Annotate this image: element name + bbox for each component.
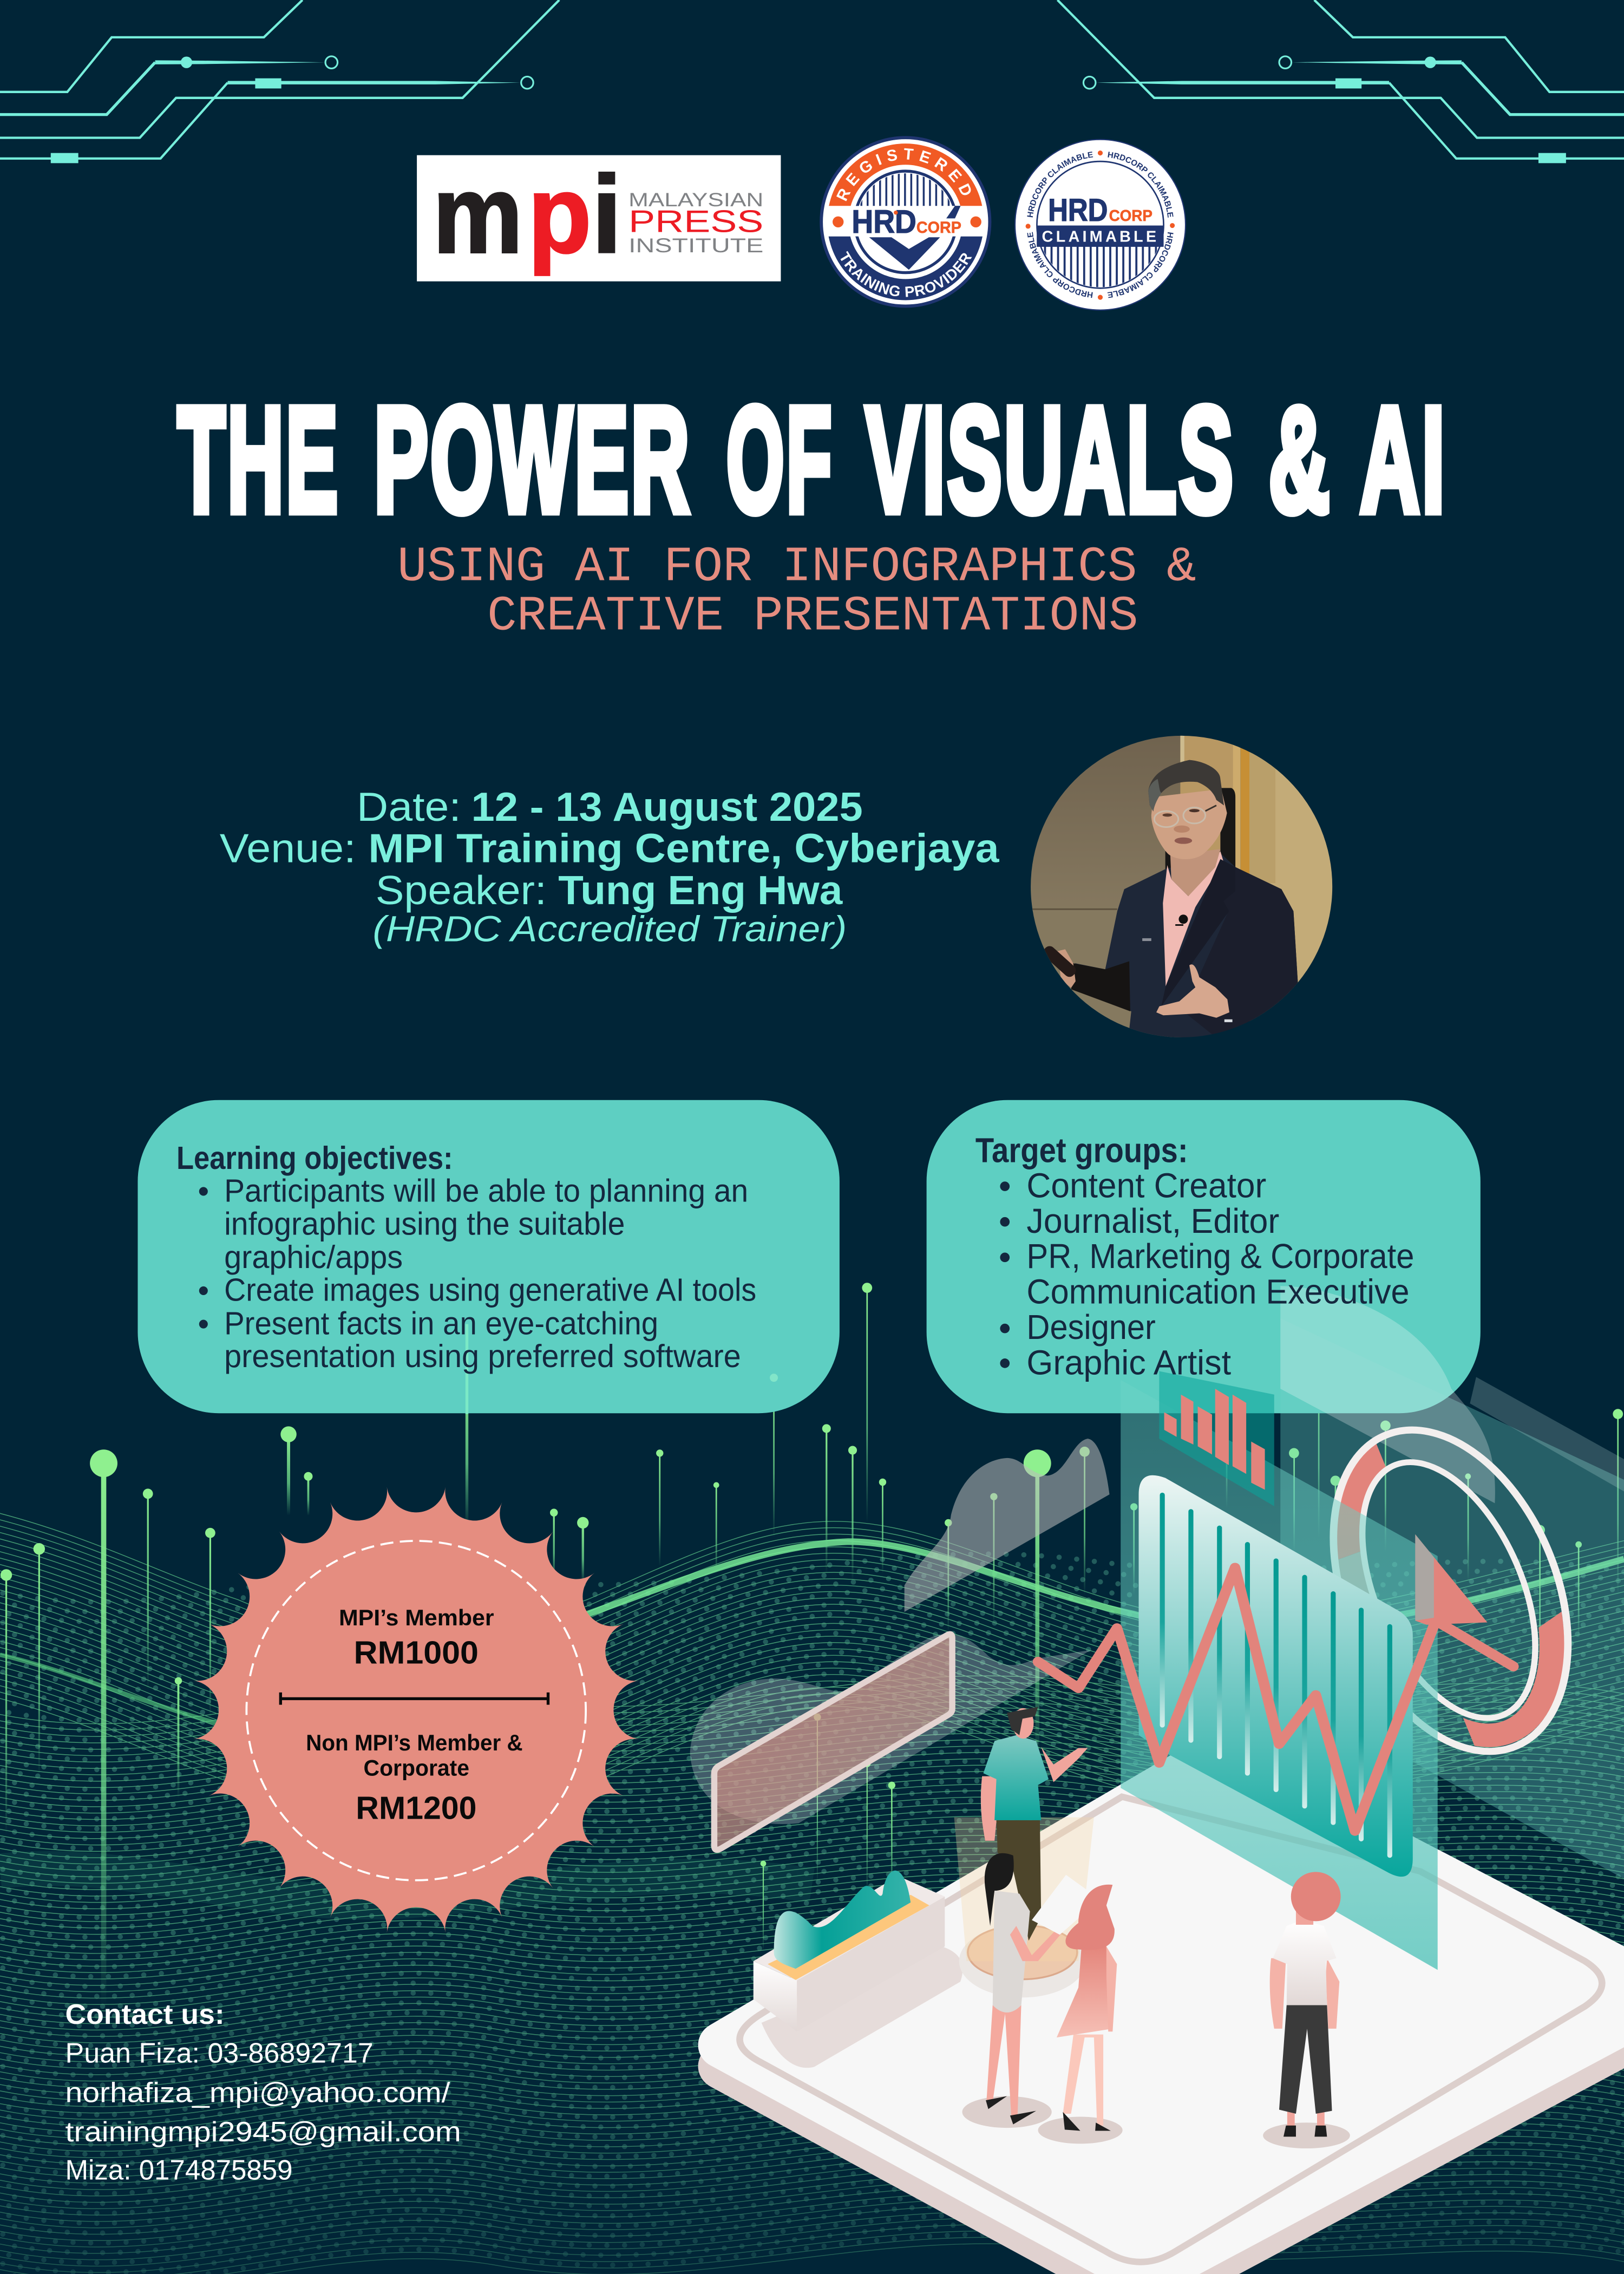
contact details: Contact us:: [66, 1999, 225, 2030]
person: woman with document: [962, 1853, 1100, 2128]
subtitle: CREATIVE PRESENTATIONS: [487, 589, 1138, 645]
logo: Malaysian Press Institute: [417, 153, 781, 282]
circuit lines top left: [0, 0, 559, 163]
badge: HRD Corp registered training provider: REGISTERED: [836, 148, 971, 201]
badge: HRD Corp claimable: [1014, 139, 1186, 311]
event details: Speaker:: [376, 867, 547, 913]
text: learning objectives: [176, 1141, 756, 1374]
contact details: Miza: 0174875859: [66, 2155, 293, 2186]
person: presenter: [981, 1707, 1088, 1940]
price badge: [193, 1487, 639, 1933]
logo: Malaysian Press Institute: p: [528, 153, 592, 276]
translucent mountain chart: [905, 1439, 1110, 1612]
contact details: norhafiza_mpi@yahoo.com/: [66, 2077, 450, 2108]
data stems with dots: [1, 1283, 1623, 2009]
event details: [220, 784, 1000, 949]
price badge: RM1000: [354, 1635, 479, 1670]
text: target groups: Communication Executive: [1026, 1272, 1410, 1311]
back translucent pane with bar chart: [1121, 1371, 1438, 1970]
main chart panel: [1139, 1475, 1413, 1877]
text: target groups: Journalist, Editor: [1026, 1201, 1279, 1240]
panel background: learning objectives: [137, 1100, 840, 1413]
badge: HRD Corp registered training provider: [820, 136, 992, 308]
text: learning objectives: Present facts in an eye-catching: [224, 1306, 658, 1341]
event details: MPI Training Centre, Cyberjaya: [368, 826, 1000, 871]
title: [178, 376, 1447, 543]
badge: HRD Corp claimable: CORP: [1109, 207, 1152, 225]
text: target groups: Designer: [1026, 1308, 1156, 1347]
person: woman in salmon dress: [1038, 1885, 1123, 2144]
podium with light beam: [954, 1817, 1094, 1997]
right translucent pane: [1280, 1286, 1624, 1879]
person: man from behind: [1263, 1872, 1350, 2148]
badge: HRD Corp registered training provider: TRAINING PROVIDER: [840, 251, 972, 297]
text: target groups: Content Creator: [1026, 1166, 1266, 1205]
badge: HRD Corp claimable: HRD: [1048, 193, 1108, 228]
price badge: Non MPI’s Member &: [306, 1730, 523, 1755]
event details: 12 - 13 August 2025: [472, 784, 863, 829]
text: target groups: [975, 1131, 1414, 1382]
planter: [754, 1871, 962, 2068]
gauge ring chart: [1330, 1426, 1572, 1755]
badge: HRD Corp claimable: HRDCORP CLAIMABLE: [1108, 152, 1174, 218]
price badge: Corporate: [364, 1755, 469, 1780]
badge: HRD Corp registered training provider: HRD: [852, 203, 916, 240]
text: learning objectives: presentation using preferred software: [224, 1339, 741, 1374]
logo: Malaysian Press Institute: m: [433, 153, 523, 276]
text: learning objectives: Learning objectives:: [176, 1141, 453, 1176]
badge: HRD Corp claimable: HRDCORP CLAIMABLE: [1027, 152, 1093, 218]
text: learning objectives: Create images using generative AI tools: [224, 1273, 756, 1308]
event details: Tung Eng Hwa: [558, 867, 843, 913]
text: target groups: PR, Marketing & Corporate: [1026, 1237, 1414, 1276]
rectangular frame: [714, 1634, 952, 1850]
text: learning objectives: Participants will be able to planning an: [224, 1173, 748, 1208]
text: target groups: Graphic Artist: [1026, 1343, 1231, 1382]
circuit lines top right: [1057, 0, 1624, 163]
badge: HRD Corp claimable: HRDCORP CLAIMABLE: [1027, 232, 1093, 298]
wave field: [0, 1508, 1624, 2274]
panel background: target groups: [927, 1100, 1481, 1413]
event details: Venue:: [220, 826, 356, 871]
contact details: Puan Fiza: 03-86892717: [66, 2038, 374, 2069]
title: POWER: [374, 376, 692, 543]
title: &: [1269, 376, 1330, 543]
platform: [723, 1759, 1624, 2274]
logo: Malaysian Press Institute: i: [592, 153, 622, 276]
badge: HRD Corp claimable: CLAIMABLE: [1042, 228, 1156, 246]
subtitle: USING AI FOR INFOGRAPHICS &: [397, 539, 1196, 595]
title: THE: [178, 376, 340, 543]
event details: Date:: [357, 784, 461, 829]
subtitle: [397, 539, 1196, 644]
illustration: isometric data platform with people: [690, 1286, 1624, 2274]
text: target groups: Target groups:: [975, 1131, 1188, 1169]
logo: Malaysian Press Institute: PRESS: [628, 205, 763, 239]
stem over learning panel: [466, 1324, 468, 1414]
zigzag line with arrow: [1038, 1534, 1514, 1831]
logo: Malaysian Press Institute: MALAYSIAN: [628, 190, 763, 211]
title: OF: [726, 376, 834, 543]
badge: HRD Corp claimable: HRDCORP CLAIMABLE: [1108, 232, 1174, 298]
stem dot over learning panel: [770, 1374, 778, 1382]
logo: Malaysian Press Institute: INSTITUTE: [628, 234, 763, 257]
contact details: trainingmpi2945@gmail.com: [66, 2116, 461, 2148]
price badge: MPI’s Member: [339, 1605, 494, 1630]
price badge: RM1200: [356, 1791, 476, 1826]
event details: (HRDC Accredited Trainer): [372, 909, 847, 949]
translucent blob: [690, 1634, 1091, 1824]
contact details: [66, 1999, 461, 2186]
title: VISUALS: [866, 376, 1235, 543]
title: AI: [1360, 376, 1447, 543]
speaker photo: [1031, 735, 1333, 1037]
badge: HRD Corp registered training provider: CORP: [916, 219, 961, 237]
text: learning objectives: graphic/apps: [224, 1240, 403, 1275]
text: learning objectives: infographic using the suitable: [224, 1207, 625, 1242]
